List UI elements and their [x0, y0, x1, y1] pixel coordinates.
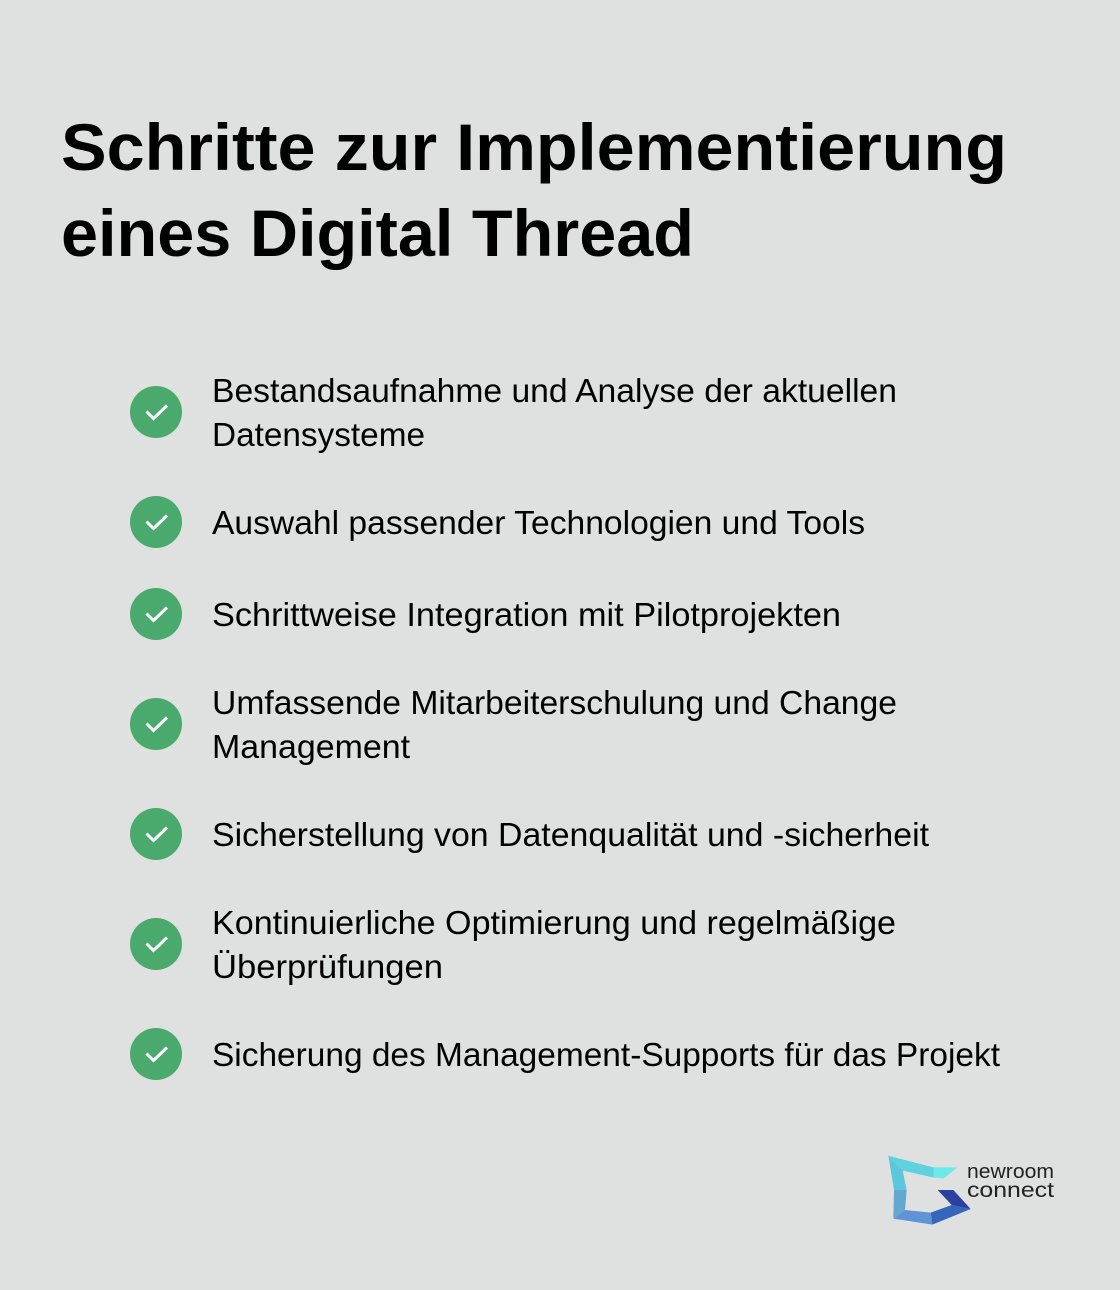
item 2 — [130, 496, 865, 548]
item 5 — [130, 808, 929, 860]
item 3 — [130, 588, 841, 640]
item 6 — [130, 904, 896, 985]
logo: newroom connect — [888, 1156, 1054, 1225]
item 6: Überprüfungen — [212, 948, 443, 985]
item 2: Auswahl passender Technologien und Tools — [212, 504, 865, 541]
item 4: Umfassende Mitarbeiterschulung und Change — [212, 684, 897, 721]
title — [61, 110, 1007, 270]
item 1: Bestandsaufnahme und Analyse der aktuellen — [212, 372, 897, 409]
item 7 — [130, 1028, 1000, 1080]
item 7: Sicherung des Management-Supports für das Projekt — [212, 1036, 1000, 1073]
checklist — [130, 372, 1000, 1080]
title: Schritte zur Implementierung — [61, 110, 1007, 184]
item 6: Kontinuierliche Optimierung und regelmäßige — [212, 904, 896, 941]
logo wordmark — [967, 1161, 1054, 1202]
logo wordmark: connect — [967, 1179, 1054, 1202]
item 1 — [130, 372, 897, 453]
title: eines Digital Thread — [61, 196, 694, 270]
item 4 — [130, 684, 897, 765]
item 5: Sicherstellung von Datenqualität und -sicherheit — [212, 816, 929, 853]
item 4: Management — [212, 728, 410, 765]
item 1: Datensysteme — [212, 416, 425, 453]
logo wordmark: newroom — [967, 1161, 1054, 1183]
item 3: Schrittweise Integration mit Pilotprojekten — [212, 596, 841, 633]
icon: logo mark — [888, 1156, 971, 1225]
